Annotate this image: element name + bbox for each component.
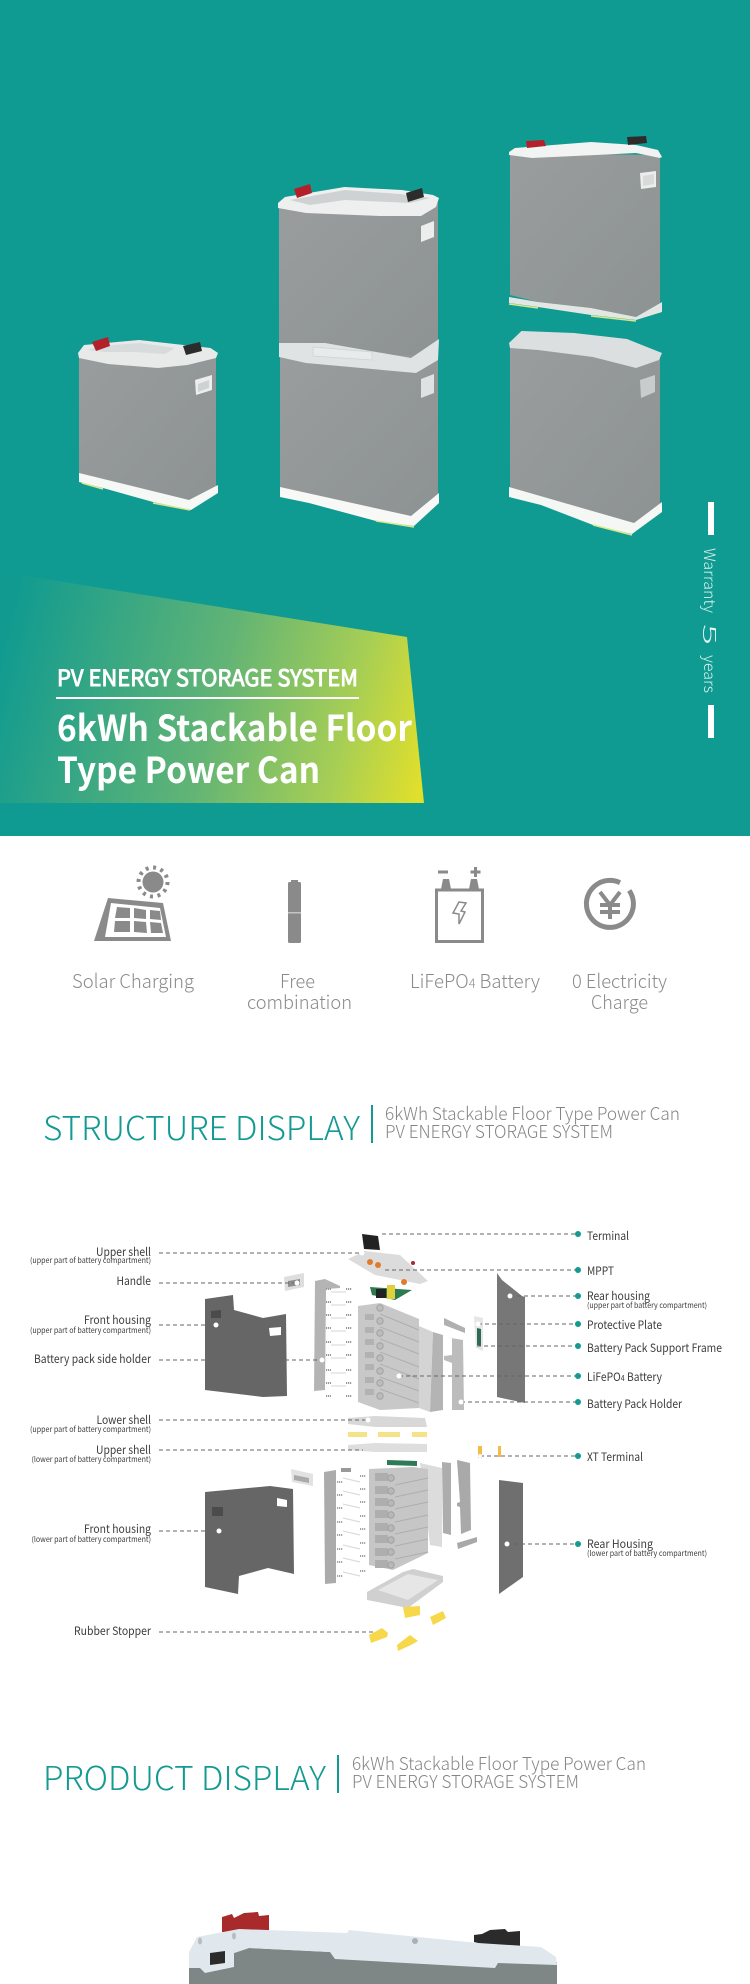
battery holders lower — [442, 1460, 477, 1549]
feature: free combination — [247, 880, 352, 1015]
callout: MPPT — [385, 1263, 614, 1279]
heading: product display — [43, 1750, 646, 1800]
side holder upper — [314, 1279, 352, 1396]
battery: bottom separated unit — [509, 331, 662, 535]
battery stack lower — [369, 1460, 442, 1570]
feature: solar charging: Solar Charging — [72, 967, 195, 994]
subtitle: PV ENERGY STORAGE SYSTEM — [57, 661, 358, 693]
callout: LiFePO4 battery — [396, 1369, 662, 1385]
callout: upper shell lower part — [32, 1442, 363, 1465]
callout: rear housing lower: Rear Housing — [587, 1536, 653, 1552]
heading: product display: PV ENERGY STORAGE SYSTEM — [352, 1768, 579, 1794]
warranty note: years — [699, 655, 723, 693]
callout: lower shell — [30, 1412, 370, 1435]
top shell with terminals — [348, 1234, 428, 1300]
warranty note: Warranty — [699, 548, 723, 613]
battery: single unit — [78, 337, 218, 510]
callout: lower shell: Lower shell — [96, 1412, 151, 1428]
callout: handle — [116, 1273, 300, 1289]
warranty note — [697, 502, 723, 738]
callout: protective plate: Protective Plate — [587, 1317, 662, 1333]
callout: handle: Handle — [116, 1273, 151, 1289]
callout: rear housing upper: (upper part of battery compartment) — [587, 1300, 707, 1311]
callout: front housing upper: (upper part of battery compartment) — [30, 1325, 151, 1336]
callout: battery pack holder — [458, 1396, 682, 1412]
callout: rear housing upper: Rear housing — [587, 1288, 650, 1304]
handle upper — [284, 1273, 304, 1291]
callout: rear housing lower — [504, 1536, 707, 1559]
left callouts — [30, 1244, 375, 1639]
callout: LiFePO4 battery: LiFePO4 Battery — [587, 1369, 662, 1385]
rear panel upper — [497, 1273, 525, 1403]
protective plate — [474, 1316, 483, 1351]
heading: structure display: PV ENERGY STORAGE SYSTEM — [385, 1118, 613, 1144]
battery: stacked pair — [278, 184, 439, 527]
icon: solar panel — [94, 868, 171, 941]
feature: LiFePO4 battery: LiFePO4 Battery — [410, 967, 541, 994]
lower compartment parts — [205, 1460, 523, 1651]
callout: rear housing lower: (lower part of battery compartment) — [587, 1548, 707, 1559]
heading: product display: 6kWh Stackable Floor Type Power Can — [352, 1750, 646, 1776]
title banner — [0, 575, 424, 803]
callout: MPPT: MPPT — [587, 1263, 614, 1279]
callout: front housing lower: Front housing — [84, 1521, 151, 1537]
feature: free combination: Free — [280, 967, 315, 994]
side holder lower — [324, 1468, 366, 1584]
handle lower — [291, 1469, 313, 1486]
callout: front housing upper — [30, 1312, 218, 1336]
heading: structure display: 6kWh Stackable Floor Type Power Can — [385, 1100, 680, 1126]
callout: rubber stopper: Rubber Stopper — [74, 1623, 151, 1639]
callout: XT terminal: XT Terminal — [587, 1449, 643, 1465]
feature: free combination: combination — [247, 988, 352, 1015]
callout: upper shell lower part: (lower part of battery compartment) — [32, 1454, 151, 1465]
callout: support frame — [477, 1340, 722, 1356]
front housing lower — [205, 1486, 294, 1594]
feature: zero electricity charge: Charge — [591, 988, 648, 1015]
callout: side holder — [34, 1351, 324, 1367]
callout: front housing upper: Front housing — [84, 1312, 151, 1328]
callout: rear housing upper — [508, 1288, 707, 1311]
feature: solar charging — [72, 868, 195, 994]
heading: structure display — [43, 1100, 680, 1150]
callout: protective plate — [476, 1317, 662, 1333]
callout: side holder: Battery pack side holder — [34, 1351, 151, 1367]
warranty note: 5 — [697, 624, 723, 645]
icon: battery with bolt — [436, 867, 482, 942]
icon: cylinder battery — [288, 880, 301, 943]
callout: front housing lower: (lower part of battery compartment) — [32, 1534, 151, 1545]
callout: upper shell: (upper part of battery compartment) — [30, 1255, 151, 1266]
callout: terminal — [382, 1228, 629, 1244]
callout: upper shell lower part: Upper shell — [96, 1442, 151, 1458]
callout: support frame: Battery Pack Support Frame — [587, 1340, 722, 1356]
main title: Type Power Can — [57, 742, 320, 794]
battery holders upper — [430, 1318, 465, 1412]
callout: lower shell: (upper part of battery compartment) — [30, 1424, 151, 1435]
battery: top separated unit — [509, 136, 662, 321]
main title: 6kWh Stackable Floor — [57, 700, 412, 752]
heading: structure display: STRUCTURE DISPLAY — [43, 1102, 360, 1150]
upper compartment parts — [205, 1234, 525, 1458]
hero panel — [0, 0, 750, 836]
callout: front housing lower — [32, 1521, 222, 1545]
feature: zero electricity charge: 0 Electricity — [572, 967, 668, 994]
feature: zero electricity charge — [572, 880, 668, 1015]
bottom tray — [367, 1569, 443, 1608]
heading: product display: PRODUCT DISPLAY — [43, 1752, 326, 1800]
rear panel lower — [499, 1480, 523, 1594]
XT terminals — [478, 1446, 501, 1458]
lower shell and seals — [348, 1416, 427, 1452]
callout: XT terminal — [478, 1449, 643, 1465]
exploded structure diagram — [30, 1228, 722, 1651]
rubber stoppers — [369, 1606, 446, 1651]
icon: yuan coin — [586, 880, 633, 927]
right callouts — [382, 1228, 722, 1559]
battery stack upper — [358, 1303, 433, 1412]
feature: LiFePO4 battery — [410, 867, 541, 994]
product photo: battery top — [189, 1912, 557, 1984]
callout: upper shell — [30, 1244, 364, 1266]
callout: battery pack holder: Battery Pack Holder — [587, 1396, 682, 1412]
front housing upper — [205, 1295, 287, 1397]
callout: upper shell: Upper shell — [96, 1244, 151, 1260]
callout: terminal: Terminal — [587, 1228, 629, 1244]
